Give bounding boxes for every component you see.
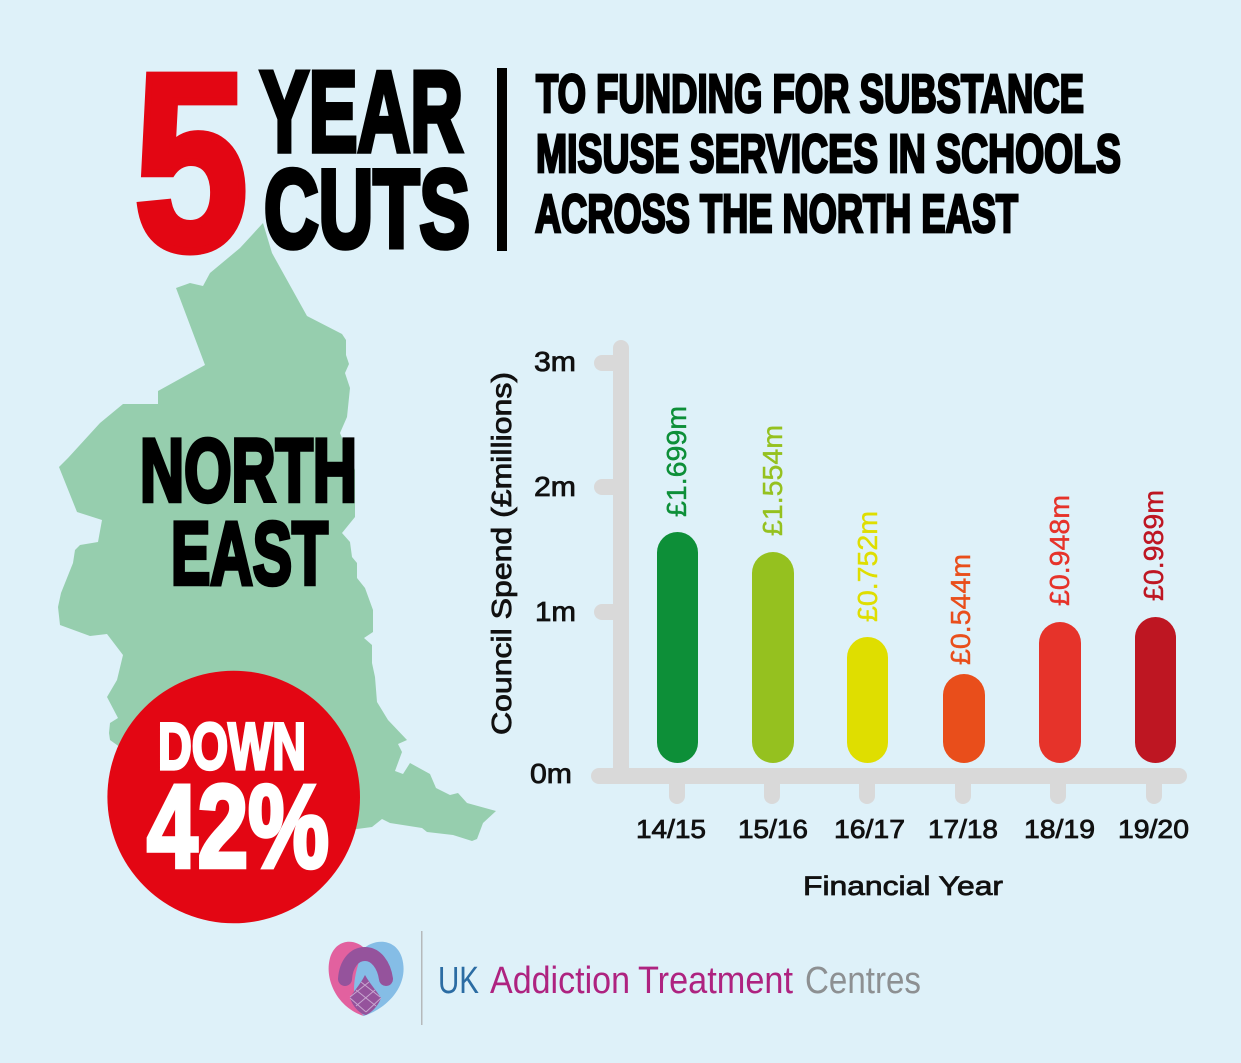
callout circle (107, 671, 360, 923)
map: North East England region (58, 223, 496, 841)
callout figure: 42%: 42% (147, 761, 329, 893)
y axis tick labels: 1m (535, 596, 576, 627)
logo wordmark: Treatment (638, 960, 793, 1002)
word: cuts: CUTS (264, 148, 470, 271)
x axis title: Financial Year (803, 871, 1003, 901)
bar 16/17: £0.752m (852, 511, 883, 622)
callout word: down: DOWN (158, 709, 306, 783)
x axis tick labels: 15/16 (738, 814, 808, 844)
bar 17/18 (943, 554, 985, 763)
logo wordmark (438, 960, 921, 1002)
word: year: YEAR (260, 49, 463, 176)
logo divider (421, 931, 422, 1025)
x axis tick labels: 14/15 (636, 814, 706, 844)
logo icon: heart of hands (329, 942, 404, 1016)
big number 5: 5 (134, 22, 248, 303)
bar 19/20: £0.989m (1138, 490, 1169, 601)
bar 14/15: £1.699m (661, 406, 692, 517)
x axis tick labels (636, 814, 1189, 844)
x axis tick labels: 16/17 (834, 814, 905, 844)
y axis tick labels: 0m (530, 758, 572, 789)
subtitle (535, 64, 1121, 244)
bar 14/15 (657, 406, 698, 763)
bar 18/19 (1039, 495, 1081, 763)
callout: down 42% (107, 671, 360, 923)
y axis tick labels (530, 346, 576, 789)
bar 15/16 (752, 425, 794, 763)
y axis tick labels: 2m (534, 471, 576, 502)
x axis tick labels: 18/19 (1024, 814, 1095, 844)
bar 16/17 (847, 511, 888, 763)
chart axes (591, 340, 1187, 804)
subtitle line 3: ACROSS THE NORTH EAST (535, 184, 1018, 244)
y axis title: Council Spend (£millions) (486, 372, 517, 735)
y axis tick labels: 3m (534, 346, 576, 377)
x axis tick labels: 17/18 (928, 814, 998, 844)
bar chart: council spend by financial year (486, 340, 1189, 901)
title divider (497, 68, 507, 251)
bar 17/18: £0.544m (945, 554, 976, 665)
bar 18/19: £0.948m (1044, 495, 1075, 606)
label word: north: NORTH (140, 420, 357, 520)
logo wordmark: UK (438, 960, 479, 1002)
bar 19/20 (1135, 490, 1176, 763)
logo: UK Addiction Treatment Centres (329, 931, 921, 1025)
logo wordmark: Addiction (490, 960, 630, 1002)
map label: north east (140, 420, 357, 603)
bar 15/16: £1.554m (757, 425, 788, 536)
logo wordmark: Centres (805, 960, 921, 1002)
label word: east: EAST (171, 503, 328, 603)
x axis tick labels: 19/20 (1118, 814, 1189, 844)
title: 5 year cuts (134, 22, 470, 303)
